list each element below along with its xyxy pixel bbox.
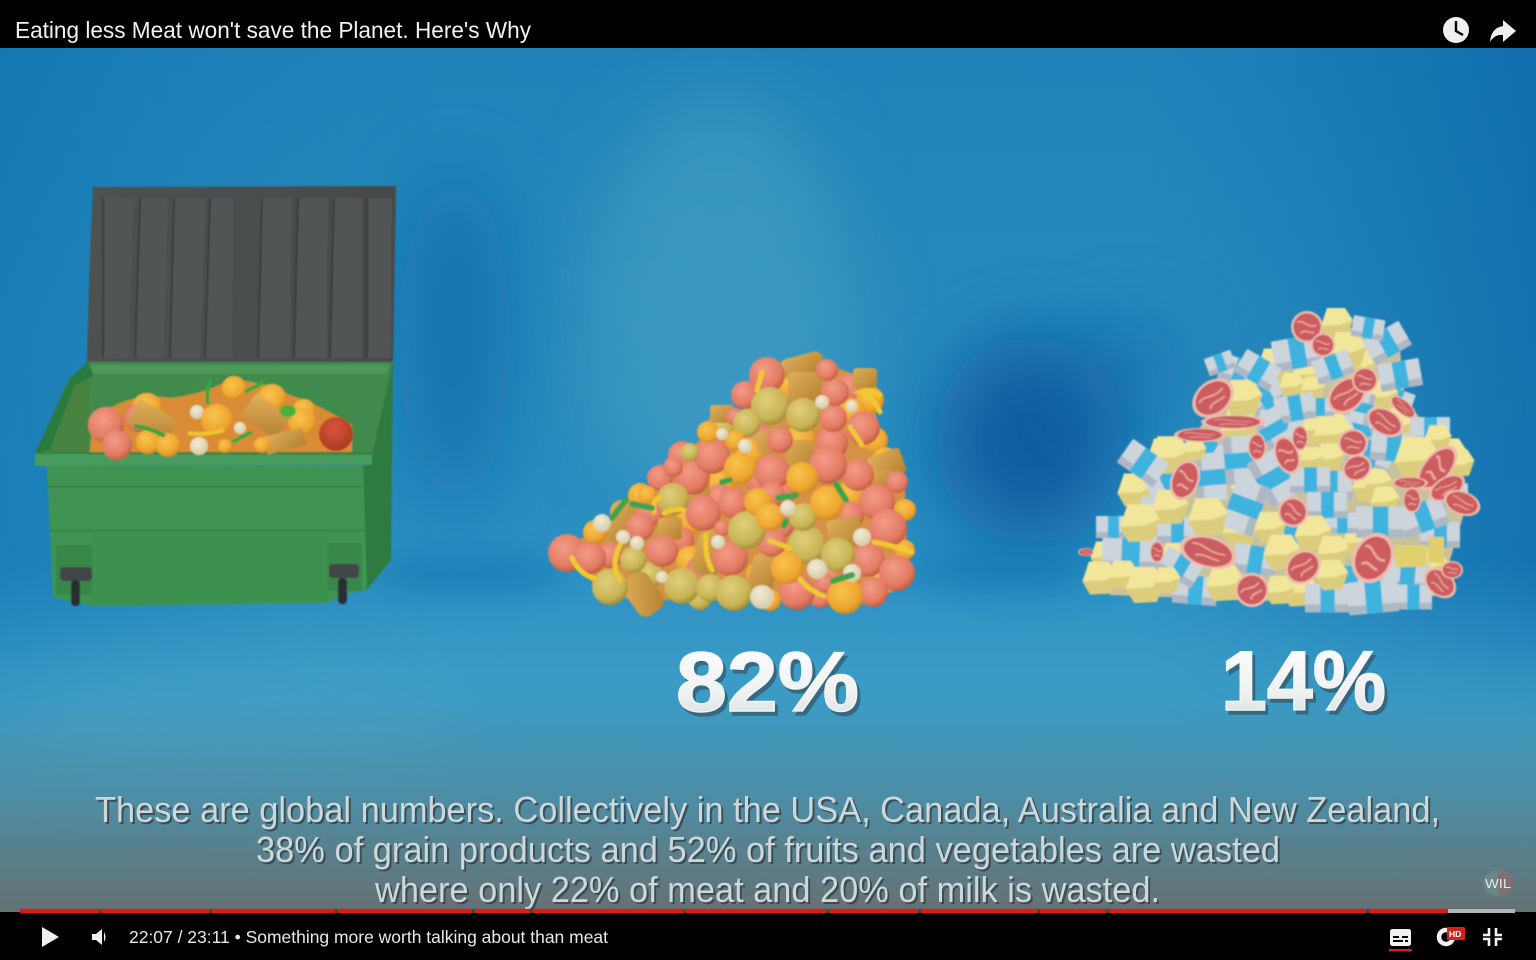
dumpster lid: [87, 186, 396, 362]
icon: volume: [92, 929, 106, 945]
statistic: 82%: 82%: [679, 639, 862, 733]
filler fruit layer: [583, 370, 916, 611]
bananas and greens: [572, 372, 912, 596]
pile of grains, fruits and vegetables: [548, 350, 916, 621]
dumpster with food: [35, 186, 396, 606]
white onions: [593, 395, 871, 609]
yellow blocks front layer: [1082, 437, 1444, 604]
statistic: 14%: 14%: [1224, 638, 1389, 732]
top bar: [0, 0, 1536, 48]
dumpster wheels: [60, 564, 359, 606]
icon: settings HD: HD: [1449, 929, 1461, 939]
olive fruits: [592, 387, 855, 611]
pile base: [565, 358, 908, 605]
icon: exit fullscreen: [1483, 928, 1502, 946]
watermark logo: [1483, 870, 1513, 896]
statistic: 82%: 82%: [676, 635, 859, 729]
video title: Eating less Meat won't save the Planet. Here's Why: [15, 17, 531, 43]
icon: play: [42, 927, 59, 947]
time and chapter label: 22:07 / 23:11 • Something more worth talking about than meat: [129, 927, 608, 947]
caption: 38% of grain products and 52% of fruits and vegetables are wasted: [258, 831, 1282, 872]
watermark logo: WIL: [1485, 876, 1511, 891]
yellow blocks back layer: [1150, 308, 1474, 514]
statistic: 14%: 14%: [1221, 634, 1386, 728]
caption: where only 22% of meat and 20% of milk is wasted.: [374, 869, 1160, 910]
icon: settings HD: [1439, 927, 1465, 944]
breads at back: [604, 350, 907, 621]
icon: share arrow: [1490, 20, 1516, 42]
milk cartons: [1096, 315, 1450, 615]
tomatoes: [548, 357, 915, 610]
dumpster body: [35, 362, 393, 606]
caption: [95, 789, 1442, 912]
progress bar: [20, 909, 1515, 913]
filler layer: [1091, 348, 1468, 606]
caption: These are global numbers. Collectively in the USA, Canada, Australia and New Zealand,: [97, 791, 1442, 832]
icon: subtitles: [1389, 929, 1412, 952]
icon: watch later clock: [1443, 17, 1469, 43]
caption: 38% of grain products and 52% of fruits and vegetables are wasted: [256, 829, 1280, 870]
caption: where only 22% of meat and 20% of milk is wasted.: [376, 871, 1162, 912]
bottom controls: [0, 909, 1536, 960]
oranges: [638, 421, 863, 614]
pile base: [1095, 325, 1465, 605]
caption: These are global numbers. Collectively in the USA, Canada, Australia and New Zealand,: [95, 789, 1440, 830]
steaks: [1078, 311, 1484, 614]
food in dumpster: [88, 376, 353, 460]
pile of meat and milk: [1078, 308, 1484, 615]
